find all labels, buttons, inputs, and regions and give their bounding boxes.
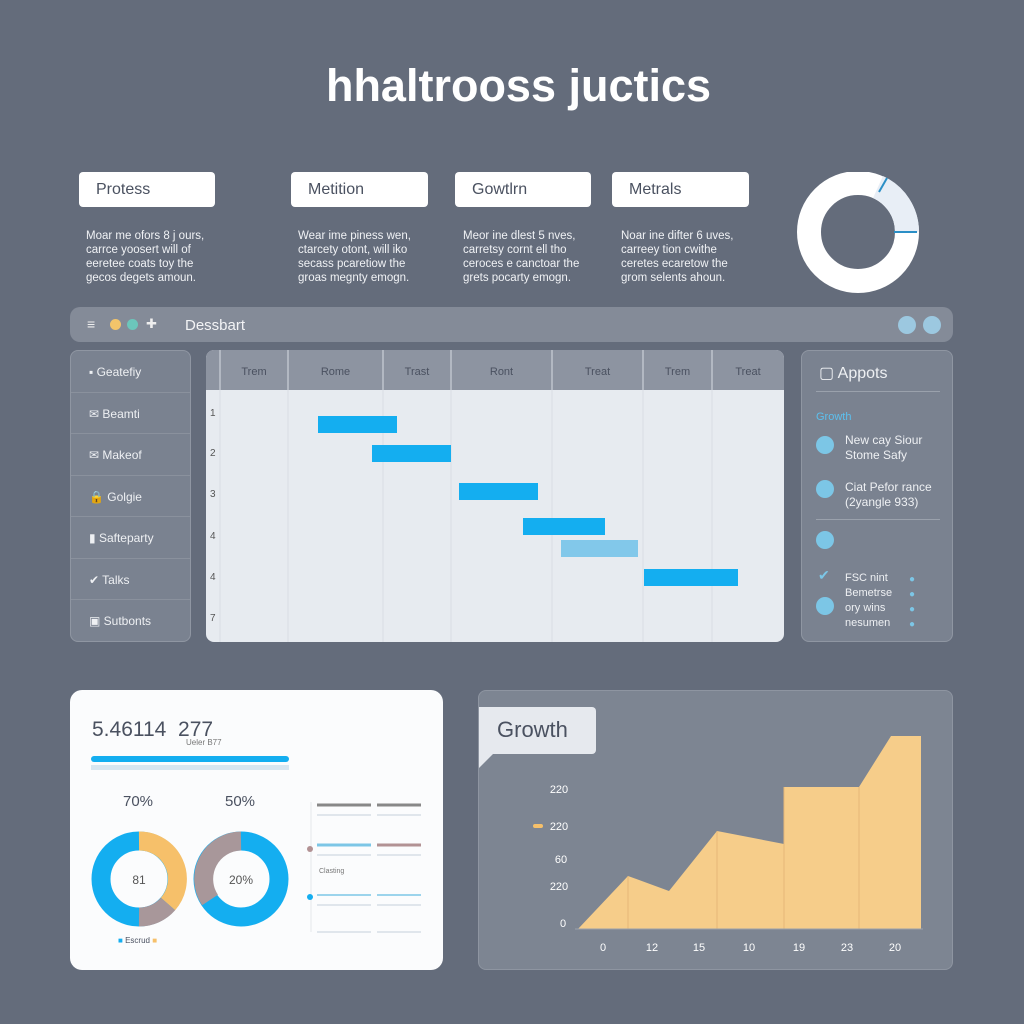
text block 2: ctarcety otont, will iko	[298, 244, 407, 256]
bottom-left stats card	[70, 690, 443, 970]
label: Protess	[79, 172, 215, 207]
text block 4: grom selents ahoun.	[621, 272, 725, 284]
gantt table: Rome	[321, 366, 350, 378]
label: Metition	[291, 172, 428, 207]
right panel: Appots: New cay Siour	[845, 433, 922, 447]
right panel: Appots: Ciat Pefor rance	[845, 480, 932, 494]
text block 1	[86, 230, 204, 284]
bottom-left stats card: 70%	[123, 793, 153, 810]
label: Gowtlrn	[455, 172, 591, 207]
bottom-left stats card: ■ Escrud ■	[118, 936, 157, 945]
growth tag: Growth	[497, 717, 568, 742]
text block 1: Moar me ofors 8 j ours,	[86, 230, 204, 242]
label: Protess: Protess	[96, 181, 150, 198]
bottom-left stats card: Ueler B77	[186, 738, 222, 747]
text block 4	[621, 230, 734, 284]
left sidebar menu	[70, 350, 191, 642]
text block 3: grets pocarty emogn.	[463, 272, 571, 284]
bottom-left stats card: 5.46114 277	[92, 718, 213, 741]
left sidebar menu: ▪ Geatefiy	[89, 365, 141, 379]
area chart: 220	[550, 821, 568, 833]
area chart: 10	[743, 942, 755, 954]
text block 2	[298, 230, 411, 284]
gantt table: 4	[210, 572, 216, 583]
area chart: 15	[693, 942, 705, 954]
dashboard header bar	[70, 307, 953, 342]
right panel: Appots: ory wins	[845, 602, 885, 614]
text block 2: Wear ime piness wen,	[298, 230, 411, 242]
text block 4: Noar ine difter 6 uves,	[621, 230, 734, 242]
text block 3: Meor ine dlest 5 nves,	[463, 230, 576, 242]
left sidebar menu: ✔ Talks	[89, 572, 130, 586]
gantt table: Ront	[490, 366, 513, 378]
right panel: Appots: ●	[909, 604, 915, 615]
text block 2: secass pcaretiow the	[298, 258, 405, 270]
text block 2: groas megnty emogn.	[298, 272, 409, 284]
right panel: Appots: Bemetrse	[845, 587, 892, 599]
right panel: Appots: nesumen	[845, 617, 890, 629]
donut 1	[92, 832, 187, 926]
area chart: 0	[560, 918, 566, 930]
text block 1: carrce yoosert will of	[86, 244, 191, 256]
left sidebar menu: ▣ Sutbonts	[89, 614, 151, 628]
right panel: Appots: ✔	[818, 567, 830, 583]
donut chart top	[797, 172, 919, 293]
right panel: Appots: (2yangle 933)	[845, 495, 918, 509]
text block 3: carretsy cornt ell tho	[463, 244, 567, 256]
label: Metrals	[612, 172, 749, 207]
text block 4: carreey tion cwithe	[621, 244, 717, 256]
line legend list	[307, 802, 421, 933]
area chart	[533, 736, 923, 954]
gantt bars	[318, 416, 397, 433]
left sidebar menu: ✉ Beamti	[89, 406, 140, 420]
area chart: 0	[600, 942, 606, 954]
area chart: 220	[550, 784, 568, 796]
label: Gowtlrn: Gowtlrn	[472, 181, 527, 198]
gantt table: 1	[210, 408, 216, 419]
right panel: Appots: FSC nint	[845, 572, 888, 584]
gantt table: 2	[210, 448, 216, 459]
donut 1: 81	[132, 873, 146, 887]
donut 2	[194, 832, 288, 926]
right panel: Appots: ●	[909, 574, 915, 585]
right panel: Appots: ●	[909, 619, 915, 630]
text block 1: eeretee coats toy the	[86, 258, 193, 270]
area chart: 60	[555, 854, 567, 866]
gantt table	[206, 350, 784, 642]
label: Metrals: Metrals	[629, 181, 681, 198]
right panel: Appots: Growth	[816, 411, 851, 423]
gantt table: 3	[210, 489, 216, 500]
right panel: Appots: Stome Safy	[845, 448, 907, 462]
area chart: 20	[889, 942, 901, 954]
gantt table: Trast	[405, 366, 429, 378]
gantt table: Treat	[585, 366, 610, 378]
text block 3	[463, 230, 579, 284]
bottom-right growth chart panel	[478, 690, 953, 970]
gantt table: 4	[210, 531, 216, 542]
right panel: Appots: ●	[909, 589, 915, 600]
label: Metition: Metition	[308, 181, 364, 198]
right panel: Appots: ▢ Appots	[819, 365, 888, 382]
gantt table: 7	[210, 613, 216, 624]
right panel: Appots	[801, 350, 953, 642]
growth tag	[479, 707, 596, 754]
left sidebar menu: ▮ Safteparty	[89, 531, 154, 545]
text block 4: ceretes ecaretow the	[621, 258, 728, 270]
dashboard header bar: Dessbart	[185, 317, 245, 334]
gantt table: Treat	[735, 366, 761, 378]
line legend list: Clasting	[319, 868, 344, 875]
donut 2: 20%	[229, 873, 253, 887]
left sidebar menu: ✉ Makeof	[89, 448, 142, 462]
area chart: 19	[793, 942, 805, 954]
dashboard header bar: ≡	[87, 316, 95, 332]
dashboard header bar: ✚	[146, 316, 157, 331]
bottom-left stats card: 50%	[225, 793, 255, 810]
title: hhaltrooss juctics	[326, 60, 711, 111]
area chart: 220	[550, 881, 568, 893]
text block 3: ceroces e canctoar the	[463, 258, 579, 270]
area chart: 23	[841, 942, 853, 954]
text block 1: gecos degets amoun.	[86, 272, 196, 284]
area chart: 12	[646, 942, 658, 954]
left sidebar menu: 🔒 Golgie	[89, 490, 142, 504]
gantt table: Trem	[665, 366, 690, 378]
gantt table: Trem	[241, 366, 267, 378]
